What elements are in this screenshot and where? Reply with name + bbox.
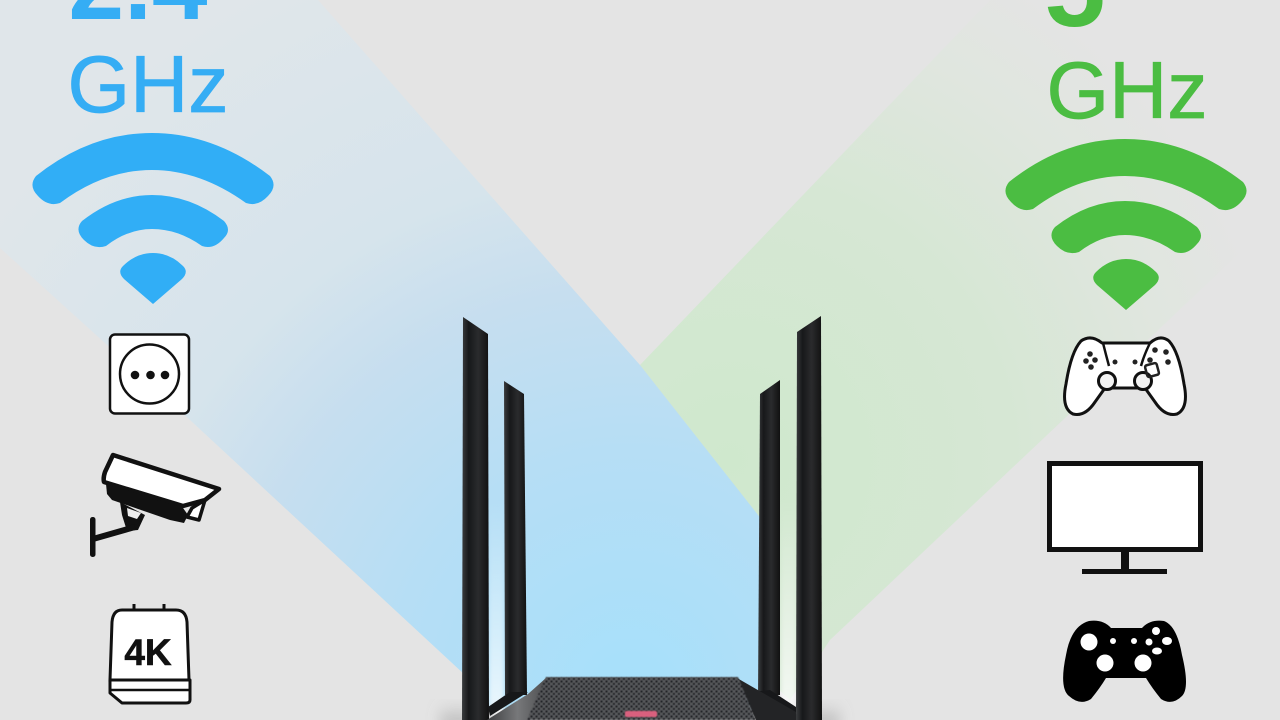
router left wing bbox=[487, 678, 548, 720]
icon: security camera bbox=[90, 455, 219, 557]
blue 2.4 GHz signal beam bbox=[0, 0, 775, 710]
antenna: right outer bbox=[796, 316, 822, 720]
router mesh top bbox=[527, 677, 756, 720]
icon: blue wifi bbox=[32, 133, 274, 304]
left strap bbox=[488, 692, 528, 716]
antenna: left inner bbox=[504, 381, 527, 695]
base shadow bbox=[440, 702, 840, 720]
router logo bbox=[625, 711, 657, 717]
heading: GHz: GHz bbox=[1046, 46, 1208, 136]
icon: outlined game controller bbox=[1065, 338, 1185, 414]
antenna: right inner bbox=[758, 380, 780, 695]
antenna: left outer bbox=[462, 317, 489, 720]
heading: GHz: GHz bbox=[68, 40, 228, 130]
icon: wall socket bbox=[110, 334, 189, 414]
router right wing bbox=[737, 678, 796, 720]
icon: 4K storage bbox=[110, 604, 190, 703]
router bbox=[440, 316, 840, 720]
icon: solid game controller bbox=[1063, 621, 1186, 702]
light halo: left antennas bbox=[489, 500, 504, 715]
icon: monitor bbox=[1050, 464, 1200, 574]
icon: 4K storage: 4K bbox=[124, 632, 172, 673]
icon: green wifi bbox=[1005, 139, 1247, 310]
right strap bbox=[752, 690, 796, 716]
light halo: right antennas bbox=[781, 500, 796, 715]
panel: 5 GHz band bbox=[1005, 0, 1247, 702]
panel: 2.4 GHz band bbox=[32, 0, 274, 703]
green 5 GHz signal beam bbox=[560, 0, 1280, 700]
